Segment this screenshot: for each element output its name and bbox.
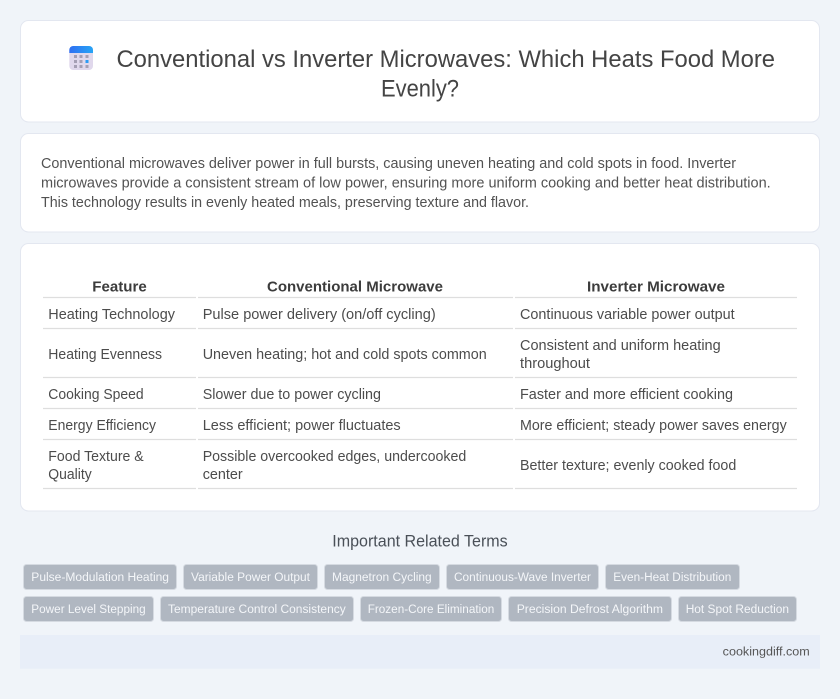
description text: This technology results in evenly heated meals, preserving texture and flavor.: [41, 195, 529, 211]
tag: Precision Defrost Algorithm: Precision Defrost Algorithm: [517, 602, 663, 616]
footer: [20, 635, 820, 669]
tag: Even-Heat Distribution: Even-Heat Distribution: [613, 570, 731, 584]
row: energy efficiency: Less efficient; power fluctuates: [203, 418, 401, 434]
title: [116, 46, 775, 102]
row: heating technology: Continuous variable power output: [520, 307, 735, 323]
tag: Variable Power Output: Variable Power Output: [191, 570, 311, 584]
row: food texture and quality: Possible overcooked edges, undercooked: [203, 449, 466, 465]
row: cooking speed: Cooking Speed: [48, 387, 144, 403]
title: Conventional vs Inverter Microwaves: Which Heats Food More: [116, 46, 775, 73]
tag: Frozen-Core Elimination: Frozen-Core Elimination: [368, 602, 494, 616]
tag: Temperature Control Consistency: [160, 596, 354, 622]
description text: microwaves provide a consistent stream of low power, ensuring more uniform cooking and better heat distribution.: [41, 176, 771, 192]
row: heating technology: Heating Technology: [48, 307, 176, 323]
panel: description: [20, 134, 820, 232]
row: food texture and quality: Quality: [48, 467, 92, 483]
tag: Hot Spot Reduction: Hot Spot Reduction: [686, 602, 789, 616]
row: heating technology: [43, 307, 797, 328]
table header row: Conventional Microwave: [267, 278, 443, 296]
row: heating evenness: throughout: [520, 356, 590, 372]
title: Evenly?: [381, 75, 459, 102]
tag: Magnetron Cycling: [324, 564, 440, 590]
tag: Power Level Stepping: Power Level Stepping: [31, 602, 146, 616]
tag: Hot Spot Reduction: [678, 596, 796, 622]
table header row: Feature: [92, 278, 147, 296]
row: food texture and quality: Food Texture &: [48, 449, 144, 465]
tags: related terms: [24, 564, 796, 622]
tag: Pulse-Modulation Heating: Pulse-Modulation Heating: [31, 570, 169, 584]
footer source text: cookingdiff.com: [723, 644, 810, 658]
row: heating evenness: Consistent and uniform heating: [520, 338, 721, 354]
panel: comparison table: [20, 244, 820, 511]
tag: Temperature Control Consistency: Temperature Control Consistency: [168, 602, 347, 616]
row: energy efficiency: More efficient; steady power saves energy: [520, 418, 787, 434]
row: cooking speed: Faster and more efficient cooking: [520, 387, 733, 403]
row: food texture and quality: center: [203, 467, 243, 483]
tag: Continuous-Wave Inverter: Continuous-Wave Inverter: [454, 570, 591, 584]
table header row: [43, 278, 797, 298]
heading: important related terms: Important Related Terms: [332, 532, 508, 550]
tag: Even-Heat Distribution: [606, 564, 740, 590]
row: food texture and quality: Better texture; evenly cooked food: [520, 458, 736, 474]
description text: [41, 156, 771, 211]
row: energy efficiency: [43, 418, 797, 440]
row: cooking speed: [43, 387, 797, 408]
tag: Pulse-Modulation Heating: [24, 564, 176, 590]
row: food texture and quality: [43, 449, 797, 488]
row: energy efficiency: Energy Efficiency: [48, 418, 157, 434]
row: heating evenness: Heating Evenness: [48, 347, 162, 363]
tag: Frozen-Core Elimination: [360, 596, 502, 622]
row: heating evenness: Uneven heating; hot and cold spots common: [203, 347, 487, 363]
row: cooking speed: Slower due to power cycling: [203, 387, 381, 403]
tag: Power Level Stepping: [24, 596, 154, 622]
tag: Magnetron Cycling: Magnetron Cycling: [332, 570, 432, 584]
description text: Conventional microwaves deliver power in full bursts, causing uneven heating and cold spots in food. Inverter: [41, 156, 736, 172]
row: heating evenness: [43, 338, 797, 378]
tag: Continuous-Wave Inverter: [446, 564, 598, 590]
table header row: Inverter Microwave: [587, 278, 725, 296]
panel: header: [20, 20, 820, 122]
icon: calendar: [69, 46, 93, 70]
row: heating technology: Pulse power delivery (on/off cycling): [203, 307, 436, 323]
tag: Precision Defrost Algorithm: [508, 596, 672, 622]
tag: Variable Power Output: [184, 564, 318, 590]
